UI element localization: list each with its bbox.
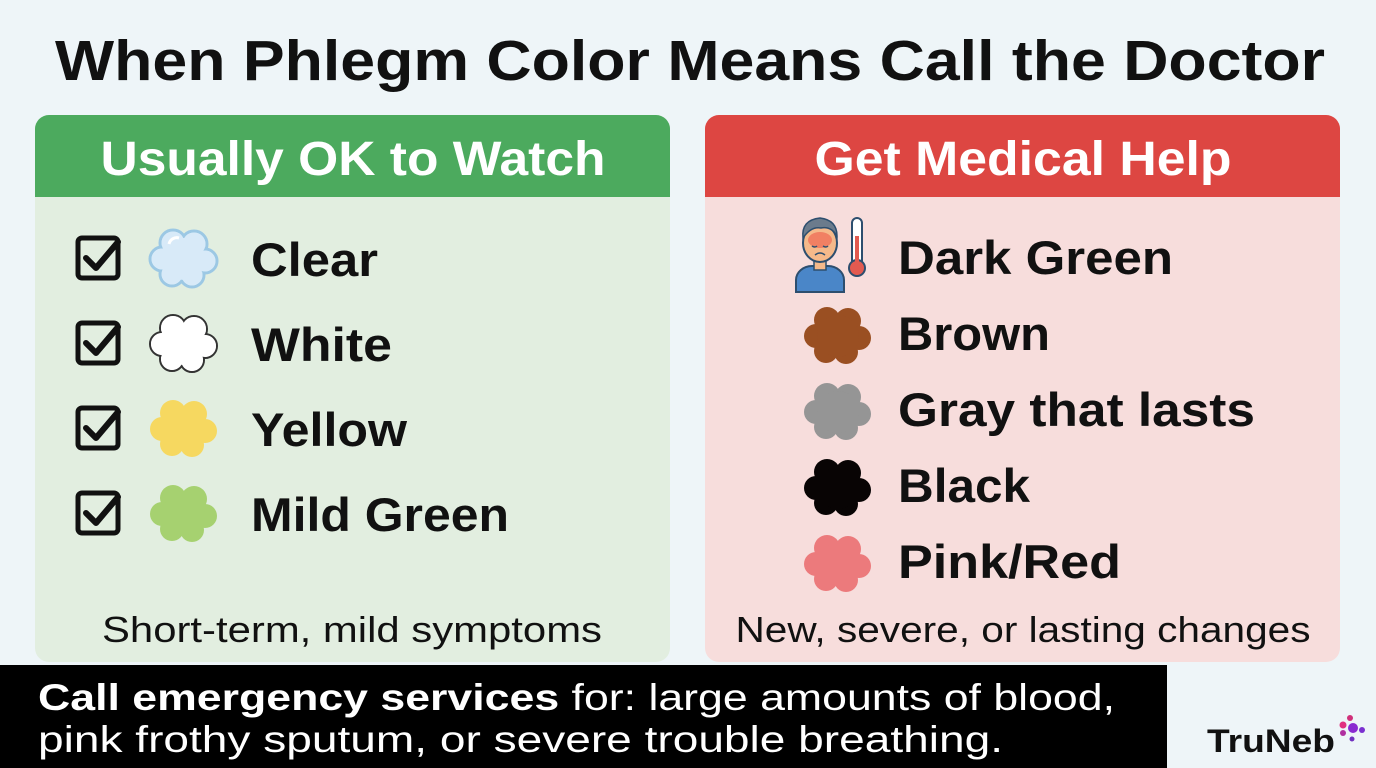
row: white: [78, 315, 392, 372]
row: mild green: [78, 485, 509, 542]
row: brown: Brown: [898, 307, 1050, 360]
emergency banner: Call emergency services for: large amounts of blood,: [38, 677, 1115, 718]
footer note left: Short-term, mild symptoms: [102, 609, 602, 650]
row: black: Black: [898, 459, 1031, 512]
row: white: White: [251, 318, 392, 371]
row: pink/red: [804, 535, 1121, 592]
footer note right: New, severe, or lasting changes: [736, 609, 1310, 650]
row: clear: Clear: [251, 233, 378, 286]
icon: sick person with thermometer: [796, 218, 865, 292]
panel: get medical help: [705, 115, 1340, 662]
panel header: green: Usually OK to Watch: [100, 133, 606, 186]
row: yellow: [78, 400, 407, 457]
row: gray: [804, 383, 1255, 440]
row: gray: Gray that lasts: [898, 383, 1255, 436]
panel header: red: [705, 115, 1340, 197]
row: dark green with sick person icon: [796, 218, 1173, 292]
row: dark green with sick person icon: Dark Green: [898, 231, 1173, 284]
panel header: green: [35, 115, 670, 197]
row: yellow: Yellow: [251, 403, 407, 456]
emergency banner: [0, 665, 1167, 768]
row: brown: [804, 307, 1050, 364]
panel: usually OK to watch: [35, 115, 670, 662]
row: clear: [78, 230, 378, 287]
emergency banner: pink frothy sputum, or severe trouble breathing.: [38, 719, 1003, 760]
panel header: red: Get Medical Help: [814, 133, 1232, 186]
title: When Phlegm Color Means Call the Doctor: [55, 29, 1325, 93]
row: pink/red: Pink/Red: [898, 535, 1121, 588]
logo: TruNeb: [1207, 715, 1365, 759]
row: mild green: Mild Green: [251, 488, 509, 541]
row: black: [804, 459, 1031, 516]
logo: TruNeb: TruNeb: [1207, 723, 1335, 759]
